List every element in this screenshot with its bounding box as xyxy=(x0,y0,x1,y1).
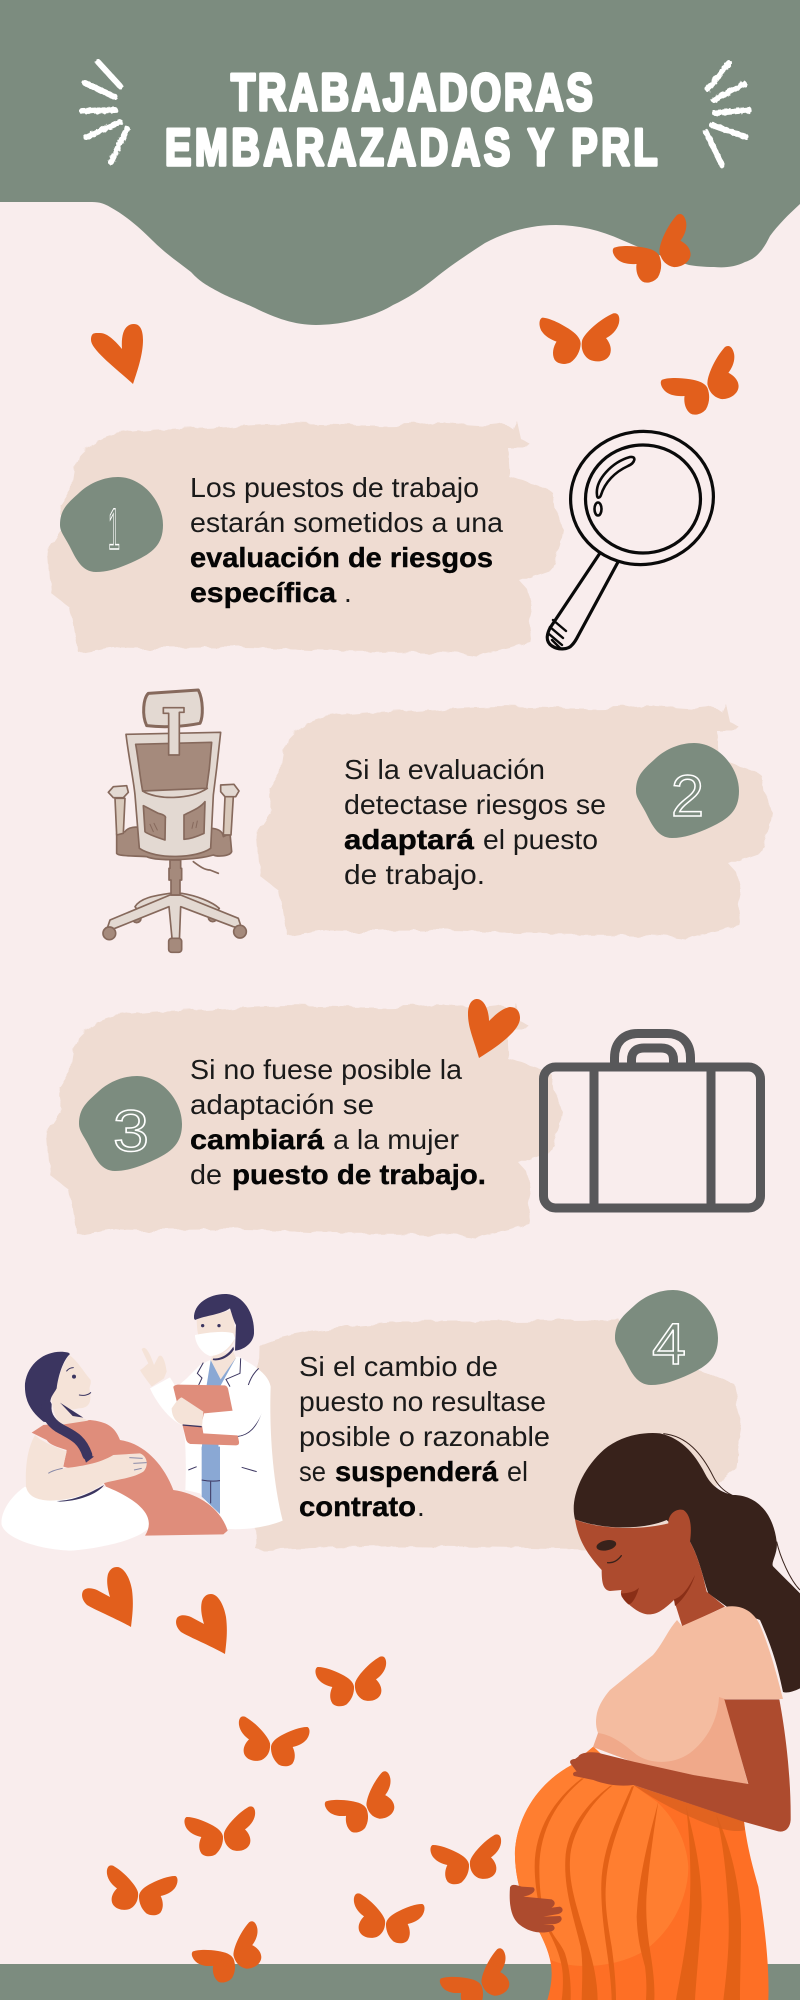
text block 1 xyxy=(190,472,503,608)
decorative butterflies and hearts xyxy=(82,213,749,2000)
chair column xyxy=(169,860,182,895)
text block 2: detectase riesgos se xyxy=(344,789,606,820)
butterfly upper right xyxy=(656,345,749,422)
chair arm posts xyxy=(115,798,125,835)
butterfly lower 6 xyxy=(107,1865,178,1915)
panel 1: evaluation xyxy=(47,420,562,656)
face xyxy=(575,1510,725,1627)
hair xyxy=(574,1433,800,1692)
chair back xyxy=(126,732,221,856)
butterfly lower 2 xyxy=(239,1716,310,1766)
illustration: pregnant woman xyxy=(510,1433,800,2000)
number blob 2 xyxy=(636,743,739,838)
footer band xyxy=(0,1964,800,2000)
text block 1: estarán sometidos a una xyxy=(190,507,503,538)
heart lower middle xyxy=(176,1594,227,1654)
text block 3: de xyxy=(190,1159,222,1190)
text block 3 xyxy=(190,1054,486,1190)
butterfly lower 3 xyxy=(321,1770,403,1839)
text block 4: se xyxy=(299,1456,326,1487)
title xyxy=(165,63,657,176)
brush background 2 xyxy=(256,703,771,939)
text block 4: suspenderá xyxy=(335,1456,498,1487)
text block 2: el puesto xyxy=(483,824,598,855)
icon: office chair xyxy=(103,690,246,952)
text block 3: a la mujer xyxy=(333,1124,459,1155)
chair arm pads xyxy=(108,786,128,798)
dress xyxy=(515,1747,769,2000)
text block 4 xyxy=(299,1351,550,1522)
lower hand xyxy=(510,1885,563,1933)
brush background 3 xyxy=(46,1002,561,1238)
chair seat xyxy=(117,827,232,860)
number 2: 2 xyxy=(671,764,704,829)
text block 3: cambiará xyxy=(190,1124,324,1155)
text block 1: Los puestos de trabajo xyxy=(190,472,479,503)
heart on panel 3 xyxy=(468,999,520,1058)
butterfly upper middle xyxy=(535,305,620,369)
icon: left sparkle lines xyxy=(82,62,127,162)
patient xyxy=(1,1352,228,1551)
text block 1: específica xyxy=(190,577,336,608)
brush background 1 xyxy=(47,420,562,656)
shirt shade xyxy=(593,1697,748,1784)
heart upper left xyxy=(91,324,143,384)
brush background 4 xyxy=(254,1320,742,1550)
chair lever xyxy=(193,862,218,873)
butterfly top xyxy=(608,213,701,290)
text block 2: de trabajo. xyxy=(344,859,485,890)
title: TRABAJADORAS xyxy=(231,63,593,121)
chair mesh upper xyxy=(136,742,212,791)
chair neck xyxy=(163,708,184,755)
dress stripes xyxy=(535,1778,741,2000)
icon: magnifying glass xyxy=(547,422,722,649)
arm shadow on dress xyxy=(633,1785,745,1831)
butterfly lower 8 xyxy=(188,1920,270,1989)
butterfly lower 7 xyxy=(354,1893,425,1943)
shirt xyxy=(593,1606,783,1784)
butterfly lower 1 xyxy=(315,1656,386,1706)
chair rear legs xyxy=(135,893,219,912)
heart lower left xyxy=(82,1567,133,1627)
dress light belly xyxy=(515,1747,688,1966)
illustration: doctor and pregnant patient xyxy=(1,1294,283,1551)
text block 1: evaluación de riesgos xyxy=(190,542,493,573)
chair mesh lower right xyxy=(184,802,205,839)
text block 4: contrato xyxy=(299,1491,416,1522)
icon: briefcase xyxy=(544,1034,760,1208)
chair headrest xyxy=(144,690,202,727)
text block 2 xyxy=(344,754,606,890)
number blob 4 xyxy=(615,1290,718,1385)
text block 4: posible o razonable xyxy=(299,1421,550,1452)
butterfly lower 9 xyxy=(436,1947,518,2000)
panel 1: evaluation: 1 xyxy=(108,497,120,562)
chair mesh lower left xyxy=(143,806,166,840)
number 4: 4 xyxy=(652,1312,686,1377)
butterfly lower 4 xyxy=(184,1806,255,1856)
panel 3: change of job xyxy=(46,1002,561,1238)
number 3: 3 xyxy=(113,1099,149,1164)
text block 2: adaptará xyxy=(344,824,474,855)
arm and hand xyxy=(570,1699,791,1832)
butterfly lower 5 xyxy=(430,1834,501,1884)
text block 4: puesto no resultase xyxy=(299,1386,546,1417)
text block 3: puesto de trabajo. xyxy=(232,1159,486,1190)
number blob 1 xyxy=(60,477,163,572)
text block 4: . xyxy=(417,1491,425,1522)
text block 3: adaptación se xyxy=(190,1089,374,1120)
chair front legs xyxy=(107,895,242,942)
text block 4: el xyxy=(507,1456,528,1487)
number blob 3 xyxy=(79,1076,182,1171)
text block 1: . xyxy=(344,577,352,608)
title: EMBARAZADAS Y PRL xyxy=(165,118,657,176)
text block 3: Si no fuese posible la xyxy=(190,1054,462,1085)
text block 2: Si la evaluación xyxy=(344,754,545,785)
header wave xyxy=(0,0,800,325)
icon: right sparkle lines xyxy=(706,63,749,165)
panel 4: suspension xyxy=(254,1290,742,1550)
panel 2: adaptation xyxy=(256,703,771,939)
text block 4: Si el cambio de xyxy=(299,1351,498,1382)
doctor xyxy=(140,1294,283,1529)
